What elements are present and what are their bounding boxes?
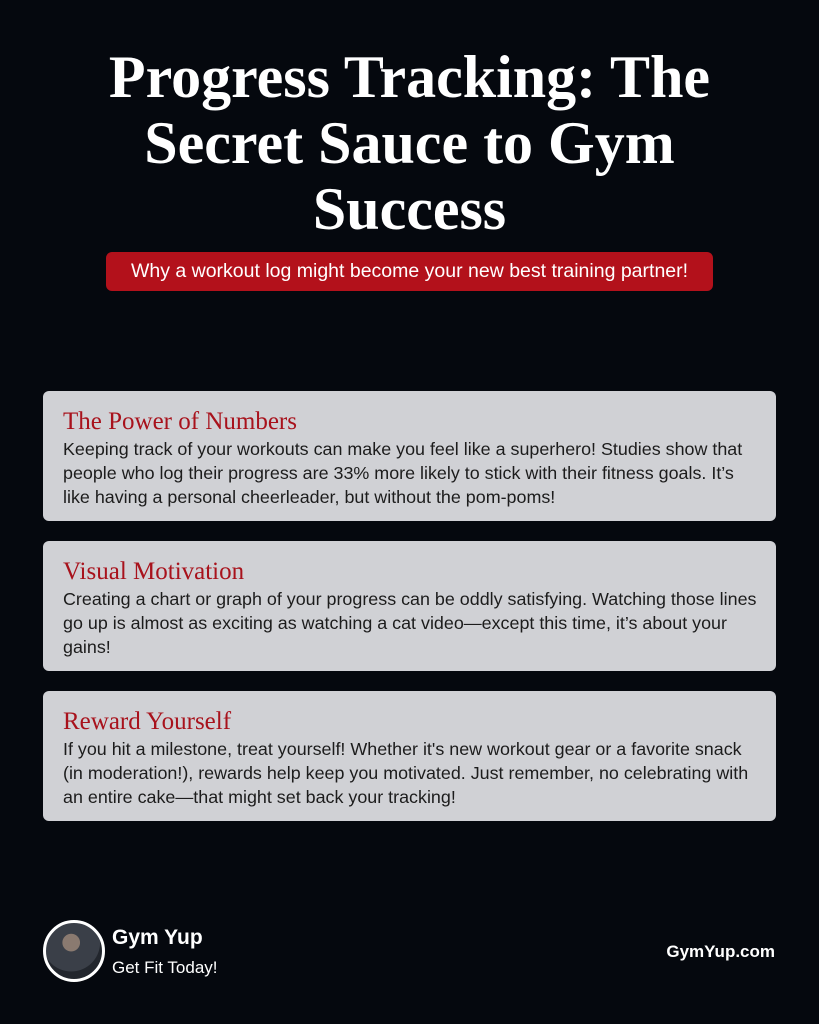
text bbox=[63, 439, 742, 507]
text bbox=[63, 589, 756, 657]
panel: reward yourself bbox=[43, 691, 776, 821]
text: an entire cake—that might set back your tracking! bbox=[63, 787, 456, 807]
tagline: Get Fit Today! bbox=[112, 958, 218, 977]
heading: Reward Yourself bbox=[63, 708, 231, 735]
text: gains! bbox=[63, 637, 111, 657]
text: Creating a chart or graph of your progress can be oddly satisfying. Watching those lines bbox=[63, 589, 756, 609]
title: Secret Sauce to Gym bbox=[144, 110, 675, 176]
text: go up is almost as exciting as watching a cat video—except this time, it’s about your bbox=[63, 613, 727, 633]
panel: power of numbers bbox=[43, 391, 776, 521]
subtitle banner: Why a workout log might become your new best training partner! bbox=[131, 260, 688, 282]
title: Progress Tracking: The bbox=[109, 44, 710, 110]
title bbox=[109, 44, 710, 242]
heading: Visual Motivation bbox=[63, 558, 244, 585]
title: Success bbox=[313, 176, 506, 242]
text: (in moderation!), rewards help keep you motivated. Just remember, no celebrating with bbox=[63, 763, 748, 783]
text: Keeping track of your workouts can make you feel like a superhero! Studies show that bbox=[63, 439, 742, 459]
text: like having a personal cheerleader, but without the pom-poms! bbox=[63, 487, 555, 507]
heading: The Power of Numbers bbox=[63, 408, 297, 435]
subtitle banner bbox=[106, 252, 713, 291]
text: If you hit a milestone, treat yourself! Whether it's new workout gear or a favorite snack bbox=[63, 739, 742, 759]
website: GymYup.com bbox=[666, 942, 775, 961]
icon: avatar bbox=[43, 920, 105, 982]
panel: visual motivation bbox=[43, 541, 776, 671]
brand name: Gym Yup bbox=[112, 926, 203, 949]
text: people who log their progress are 33% more likely to stick with their fitness goals. It’s bbox=[63, 463, 734, 483]
text bbox=[63, 739, 748, 807]
